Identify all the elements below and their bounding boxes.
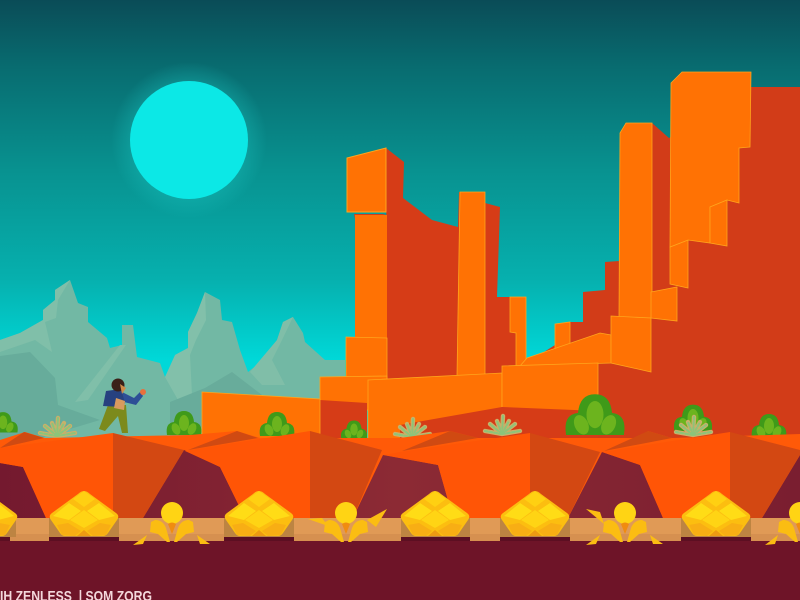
- left rock formation: [320, 148, 526, 410]
- stair step one: [651, 287, 677, 321]
- face: [120, 384, 126, 394]
- gold gem five: [682, 491, 750, 536]
- stair step two: [670, 240, 688, 288]
- belly: [114, 398, 125, 410]
- gold gem one: [50, 491, 118, 536]
- red cliff mass: [500, 87, 800, 450]
- plant: left edge bush: [0, 412, 18, 433]
- plate one: [0, 433, 184, 518]
- central pillar: [457, 192, 485, 376]
- ground plates: [0, 431, 800, 520]
- plant: desert shrub one: [40, 418, 75, 436]
- plate four: [602, 432, 800, 518]
- character walking: [99, 378, 146, 433]
- plant: desert shrub two: [395, 419, 430, 437]
- gold figure three: [586, 502, 663, 545]
- diamond under-shadows: [0, 518, 751, 537]
- low foreground blocks: [202, 363, 598, 445]
- wedge ledge: [520, 333, 611, 366]
- plant: bush with shrub: [674, 405, 712, 435]
- stair step three: [710, 200, 727, 246]
- right low block: [502, 363, 598, 411]
- raised arm: [120, 392, 143, 405]
- gold figure two: [308, 502, 387, 542]
- back ridge: [0, 431, 800, 520]
- gold gem: edge left: [0, 491, 17, 536]
- block shadow: [354, 214, 386, 224]
- plant: bush two: [167, 411, 201, 436]
- plant: bush three: [260, 412, 294, 437]
- sun: [111, 62, 267, 218]
- sloped shadow: [400, 407, 598, 445]
- red rock mass: [386, 148, 526, 410]
- gold gem three: [401, 491, 469, 536]
- small stair pillar: [555, 322, 570, 350]
- sky background: [0, 0, 800, 450]
- distant mountains: [0, 280, 345, 450]
- gold gem two: [225, 491, 293, 536]
- dark recesses: [0, 450, 800, 518]
- plate three: [384, 433, 600, 518]
- short right pillar: [510, 297, 526, 368]
- plant: large bush: [565, 394, 625, 437]
- red base: [320, 400, 367, 445]
- tower base block: [611, 316, 651, 372]
- gold gem four: [501, 491, 569, 536]
- head: [112, 378, 124, 392]
- right rock formation: [500, 72, 800, 450]
- plant: bush four: [341, 420, 367, 439]
- plant: desert shrub three: [485, 416, 520, 434]
- tall left column: [355, 215, 387, 339]
- ridge shadows: [0, 431, 672, 451]
- diamond shadow bases: [0, 537, 751, 541]
- column step: [346, 337, 387, 380]
- gold figure four: [765, 502, 800, 545]
- lower step: [320, 376, 387, 410]
- middle tower: [619, 123, 652, 318]
- torso: [103, 389, 125, 407]
- stone band: [0, 518, 800, 541]
- hand: [140, 389, 146, 395]
- gold figure one: [133, 502, 210, 545]
- plate two: [185, 431, 382, 518]
- upper overhanging block: [347, 148, 386, 212]
- legs: [99, 405, 128, 433]
- left low block: [202, 392, 320, 445]
- plant: right bush: [752, 414, 786, 439]
- tall upper tower: [670, 72, 751, 247]
- central low block: [368, 373, 502, 445]
- maroon base: [0, 541, 800, 600]
